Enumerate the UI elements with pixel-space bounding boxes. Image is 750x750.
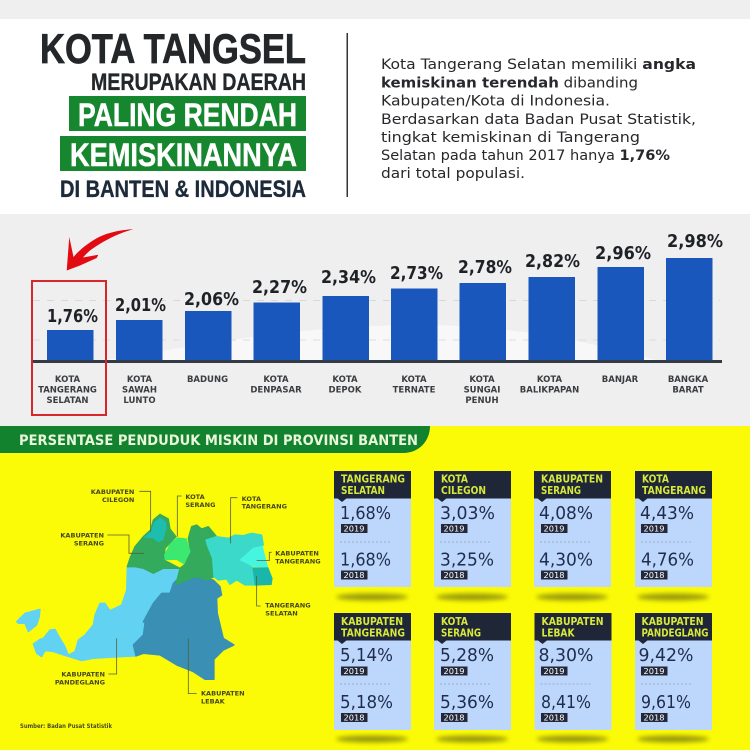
title: KEMISKINANNYA [70, 137, 297, 173]
bar labels: TANGERANG [38, 386, 97, 396]
card: Kota Cilegon: 2019 [444, 524, 465, 534]
region: Kabupaten Serang [127, 514, 217, 584]
icon: red arrow [67, 229, 133, 270]
map labels: KABUPATEN [60, 531, 104, 539]
card: Tangerang Selatan: TANGERANG [341, 474, 405, 486]
map labels: TANGERANG [242, 503, 287, 511]
region: Pandeglang [17, 567, 180, 661]
highlight box [32, 281, 106, 415]
bar labels: SAWAH [122, 386, 157, 396]
panel: yellow background [0, 426, 750, 750]
bar labels: DEPOK [329, 386, 362, 396]
intro paragraph: Kabupaten/Kota di Indonesia. [381, 94, 610, 110]
card: Kabupaten Serang: 2019 [544, 524, 565, 534]
title: KOTA TANGSEL [40, 25, 306, 72]
map labels: KOTA [185, 493, 206, 501]
panel: bar chart background [0, 214, 750, 426]
card: Kota Tangerang [635, 471, 712, 600]
intro paragraph: kemiskinan terendah dibanding [381, 76, 638, 92]
card: Kota Cilegon [434, 471, 511, 600]
map labels: KABUPATEN [275, 550, 319, 558]
card: Kota Cilegon: 3,03% [440, 503, 495, 524]
bar labels: BADUNG [187, 375, 228, 385]
bar labels: KOTA [263, 375, 289, 385]
card: Kabupaten Tangerang [334, 613, 411, 742]
intro paragraph: Selatan pada tahun 2017 hanya 1,76% [381, 148, 670, 164]
bar labels [38, 375, 709, 406]
card: Kabupaten Lebak: 8,30% [538, 645, 594, 666]
map labels [55, 488, 321, 706]
card: Tangerang Selatan: 2018 [344, 571, 365, 580]
card: Tangerang Selatan: SELATAN [341, 485, 385, 497]
bar labels: KOTA [469, 375, 495, 385]
card: Kota Serang: 5,36% [440, 692, 494, 713]
bar labels: KOTA [537, 375, 562, 385]
card: Kabupaten Tangerang: 2018 [344, 714, 365, 722]
card: Kabupaten Pandeglang: KABUPATEN [642, 616, 704, 628]
card: Kabupaten Pandeglang: 2018 [644, 714, 665, 722]
card: Kabupaten Serang: 4,08% [539, 503, 593, 524]
card: Kota Cilegon: CILEGON [441, 485, 486, 497]
map labels: TANGERANG [265, 602, 311, 610]
card: Kabupaten Pandeglang: 2019 [644, 667, 665, 676]
bar chart [32, 232, 723, 363]
card: Kota Cilegon: 2018 [444, 571, 465, 580]
card: Kota Cilegon: 3,25% [440, 550, 494, 570]
bar chart: 2,96% [595, 244, 651, 264]
map labels: KABUPATEN [91, 488, 134, 496]
bar chart: 2,27% [252, 278, 307, 298]
card: Kabupaten Pandeglang: PANDEGLANG [642, 628, 708, 640]
card: Tangerang Selatan: 1,68% [340, 550, 391, 570]
card: Kabupaten Pandeglang [635, 613, 712, 742]
map labels: SELATAN [265, 610, 298, 618]
card: Kabupaten Tangerang: KABUPATEN [341, 616, 403, 628]
card: Kota Serang: SERANG [441, 628, 481, 640]
title: MERUPAKAN DAERAH [91, 69, 306, 96]
map labels: SERANG [74, 539, 104, 547]
card: Kota Tangerang: 2018 [644, 571, 665, 580]
card: Tangerang Selatan: 1,68% [340, 503, 391, 524]
title [40, 25, 306, 203]
card: Kota Serang: KOTA [441, 616, 469, 628]
card: Kabupaten Lebak: 8,41% [541, 692, 591, 713]
map labels: KABUPATEN [201, 690, 245, 698]
title: PALING RENDAH [78, 97, 297, 133]
map labels: PANDEGLANG [55, 679, 105, 687]
title: DI BANTEN & INDONESIA [60, 176, 306, 203]
card: Kota Cilegon: KOTA [441, 474, 469, 486]
card: Kota Tangerang: 2019 [644, 524, 665, 534]
bar labels: BARAT [672, 386, 704, 396]
card: Kabupaten Tangerang: 5,18% [340, 692, 393, 713]
intro paragraph: Kota Tangerang Selatan memiliki angka [381, 57, 696, 73]
bar labels: KOTA [332, 375, 358, 385]
bar chart: 2,78% [458, 258, 512, 278]
source note: Sumber: Badan Pusat Statistik [20, 723, 113, 730]
region: Tangerang Selatan [252, 567, 273, 586]
card: Kabupaten Serang: KABUPATEN [541, 474, 603, 486]
card: Kota Serang [434, 613, 511, 742]
intro paragraph: dari total populasi. [381, 166, 525, 182]
card: Kota Serang: 2019 [444, 667, 465, 676]
bar labels: SUNGAI [464, 386, 500, 396]
card: Kabupaten Lebak: 2018 [544, 714, 565, 722]
card: Kabupaten Lebak [534, 613, 612, 742]
map labels: CILEGON [102, 496, 134, 504]
bar chart: 2,98% [667, 232, 723, 252]
card: Tangerang Selatan [334, 471, 411, 600]
intro paragraph: Berdasarkan data Badan Pusat Statistik, [381, 112, 696, 128]
region: Kota Tangerang [239, 546, 268, 568]
bar labels: SELATAN [46, 396, 89, 406]
bar labels: LUNTO [123, 396, 156, 406]
card: Kabupaten Tangerang: TANGERANG [341, 628, 405, 640]
map labels: TANGERANG [275, 558, 321, 566]
card: Kabupaten Serang: SERANG [541, 485, 581, 497]
card: Kabupaten Lebak: 2019 [544, 667, 565, 676]
bar labels: BANJAR [602, 375, 639, 385]
card: Kabupaten Serang: 2018 [544, 571, 565, 580]
card: Kabupaten Serang [534, 471, 611, 600]
bar labels: KOTA [55, 375, 80, 385]
card: Kota Tangerang: KOTA [642, 474, 670, 486]
bar chart: 2,06% [184, 290, 239, 310]
map of Banten [17, 488, 321, 706]
card: Kabupaten Tangerang: 5,14% [340, 645, 393, 666]
card: Kota Serang: 5,28% [440, 645, 494, 666]
bar chart: 2,34% [321, 268, 376, 288]
region: Lebak [133, 577, 234, 679]
bar labels: KOTA [401, 375, 427, 385]
bar labels: PENUH [465, 396, 499, 406]
map labels: KABUPATEN [61, 671, 105, 679]
map labels: SERANG [185, 501, 215, 509]
card: Tangerang Selatan: 2019 [344, 524, 365, 534]
card: Kabupaten Lebak: LEBAK [542, 628, 575, 640]
bar labels: BALIKPAPAN [520, 386, 579, 396]
bar labels: TERNATE [393, 386, 436, 396]
intro paragraph: tingkat kemiskinan di Tangerang [381, 130, 640, 146]
bar chart: 2,73% [390, 264, 443, 284]
bar labels: KOTA [127, 375, 152, 385]
bar chart: 2,82% [525, 252, 580, 272]
leader lines [107, 491, 272, 694]
card: Kota Tangerang: 4,43% [640, 503, 694, 524]
card: Kota Serang: 2018 [444, 714, 465, 722]
card: Kabupaten Tangerang: 2019 [344, 667, 365, 676]
intro paragraph [381, 57, 696, 182]
card: Kota Tangerang: 4,76% [641, 550, 694, 570]
banner heading [0, 426, 430, 453]
region: Kota Serang [164, 537, 191, 564]
map labels: LEBAK [201, 698, 226, 706]
region: Cilegon [143, 518, 167, 542]
card: Kabupaten Pandeglang: 9,61% [641, 692, 691, 713]
bar chart: 2,01% [115, 296, 166, 316]
card: Kabupaten Pandeglang: 9,42% [638, 645, 694, 666]
bar chart: 1,76% [47, 307, 98, 327]
region: Kabupaten Tangerang [206, 533, 263, 585]
bar labels: DENPASAR [250, 386, 302, 396]
card: Kabupaten Serang: 4,30% [539, 550, 593, 570]
card: Kota Tangerang: TANGERANG [642, 485, 706, 497]
card: Kabupaten Lebak: KABUPATEN [542, 616, 604, 628]
banner heading: PERSENTASE PENDUDUK MISKIN DI PROVINSI BANTEN [19, 433, 418, 449]
map labels: KOTA [242, 495, 262, 503]
bar labels: BANGKA [668, 375, 709, 385]
